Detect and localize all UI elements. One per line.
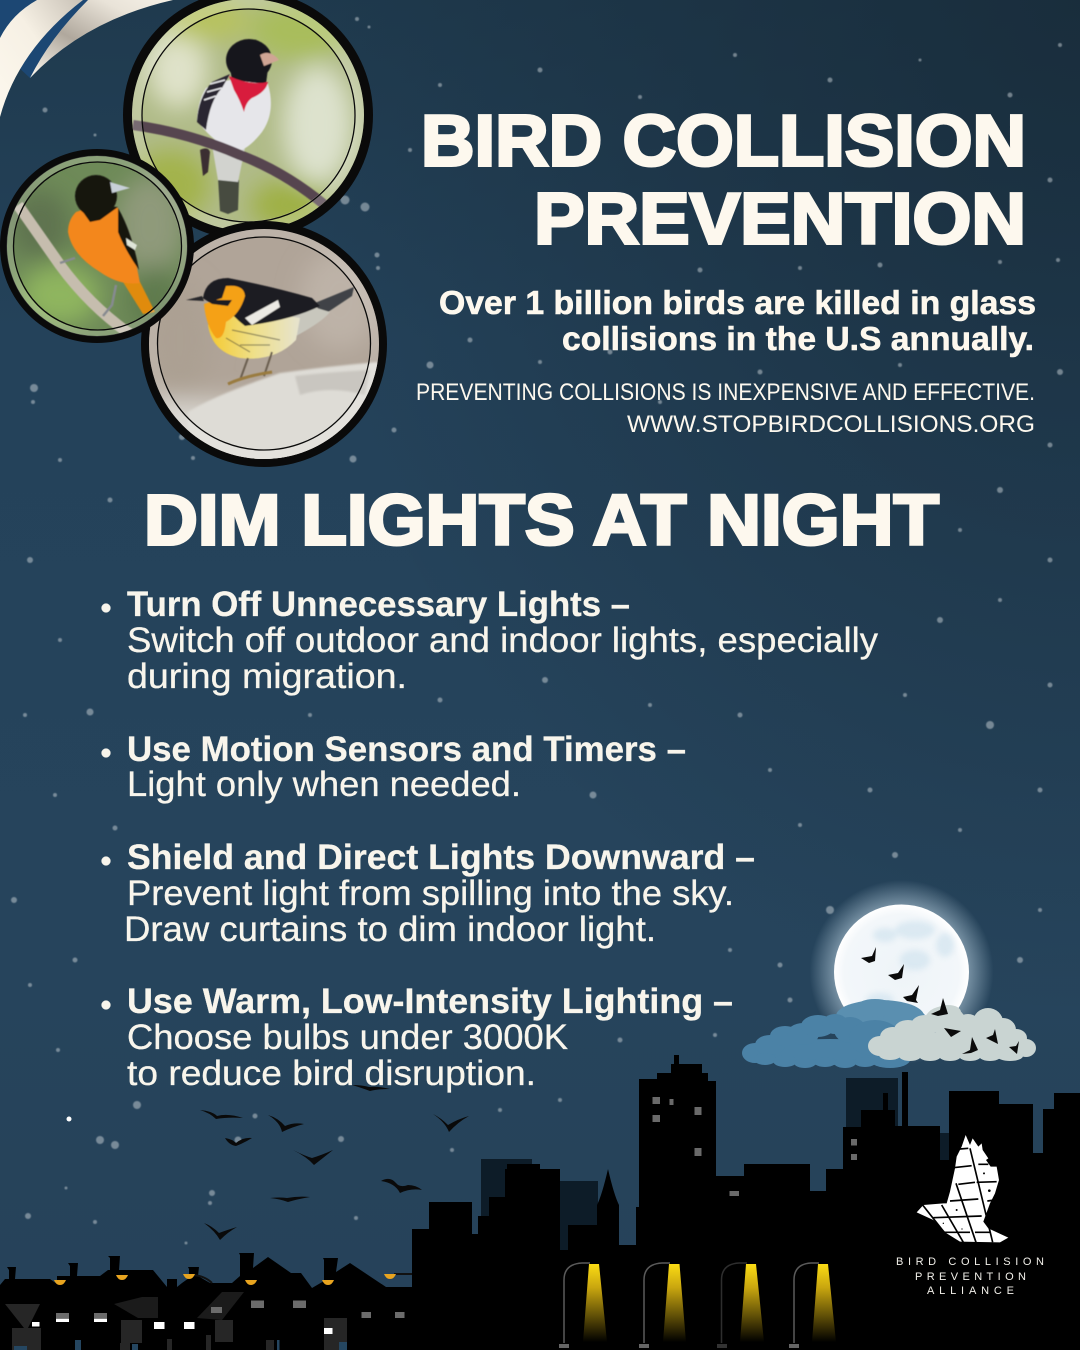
supporting line and website: WWW.STOPBIRDCOLLISIONS.ORG bbox=[627, 411, 1035, 438]
tip: shield lights: Shield and Direct Lights Downward – bbox=[127, 838, 755, 877]
tip: warm lighting bbox=[102, 982, 733, 1093]
skyline: distant buildings bbox=[481, 1078, 952, 1251]
photo circle: blackburnian warbler bbox=[140, 220, 390, 470]
title: PREVENTION bbox=[534, 180, 1026, 260]
house windows bbox=[56, 1300, 404, 1318]
photo circle: rose-breasted grosbeak bbox=[120, 0, 380, 240]
subtitle statistic: Over 1 billion birds are killed in glass bbox=[439, 284, 1036, 321]
decorative corner swoosh bbox=[0, 0, 173, 117]
cloud: pale bbox=[868, 1005, 1036, 1061]
supporting line and website bbox=[416, 379, 1035, 438]
rock bbox=[188, 362, 378, 470]
street lamp 3 bbox=[717, 1263, 764, 1348]
flock over the moon bbox=[861, 947, 1019, 1054]
tip: turn off lights bbox=[102, 585, 879, 696]
small street lamps over houses bbox=[54, 1274, 412, 1285]
logo bird mark bbox=[917, 1135, 1008, 1242]
photo circle: baltimore oriole bbox=[0, 149, 195, 345]
body bbox=[68, 207, 140, 284]
head bbox=[225, 38, 272, 73]
subtitle statistic bbox=[439, 284, 1036, 357]
tip: turn off lights: Turn Off Unnecessary Lights – bbox=[127, 585, 630, 624]
subtitle statistic: collisions in the U.S annually. bbox=[562, 320, 1034, 357]
skyline windows bbox=[652, 1097, 857, 1196]
tip: turn off lights: Switch off outdoor and indoor lights, especially bbox=[127, 621, 879, 660]
street lamp 1 bbox=[559, 1263, 607, 1348]
branch bbox=[18, 205, 130, 334]
tail bbox=[123, 282, 155, 314]
tip: turn off lights: during migration. bbox=[127, 657, 407, 696]
logo wordmark: BIRD COLLISION bbox=[896, 1256, 1044, 1268]
logo wordmark: ALLIANCE bbox=[927, 1285, 1014, 1297]
logo wordmark bbox=[896, 1256, 1044, 1297]
section heading: DIM LIGHTS AT NIGHT bbox=[144, 482, 939, 560]
tip: warm lighting: Choose bulbs under 3000K bbox=[127, 1018, 568, 1057]
neighbourhood houses bbox=[0, 1253, 412, 1350]
tips list bbox=[102, 585, 879, 1093]
blue door gaps bbox=[14, 1340, 347, 1350]
alliance logo bbox=[896, 1135, 1044, 1297]
street lamp 4 bbox=[789, 1263, 836, 1348]
tail and under parts bbox=[218, 178, 239, 214]
warbler bbox=[186, 278, 354, 384]
title: BIRD COLLISION bbox=[421, 102, 1026, 182]
cloud: blue bbox=[742, 999, 927, 1068]
house fronts bbox=[5, 1292, 347, 1350]
head bbox=[75, 175, 117, 217]
bright star bbox=[66, 1116, 72, 1122]
tip: shield lights bbox=[102, 838, 755, 949]
branch bbox=[133, 125, 326, 206]
tip: warm lighting: to reduce bird disruption. bbox=[127, 1054, 536, 1093]
logo wordmark: PREVENTION bbox=[915, 1271, 1026, 1283]
tip: warm lighting: Use Warm, Low-Intensity Lighting – bbox=[127, 982, 733, 1021]
flying birds flock bbox=[200, 1085, 469, 1240]
tip: shield lights: Prevent light from spilling into the sky. bbox=[127, 874, 734, 913]
tip: motion sensors: Light only when needed. bbox=[127, 765, 521, 804]
body bbox=[197, 79, 271, 152]
title bbox=[421, 102, 1026, 260]
tip: motion sensors bbox=[102, 730, 686, 804]
tip: shield lights: Draw curtains to dim indoor light. bbox=[124, 910, 656, 949]
street lamp 2 bbox=[639, 1263, 686, 1348]
skyline: city silhouette bbox=[412, 1055, 1080, 1350]
full moon bbox=[810, 880, 994, 1064]
tip: motion sensors: Use Motion Sensors and Timers – bbox=[127, 730, 686, 769]
